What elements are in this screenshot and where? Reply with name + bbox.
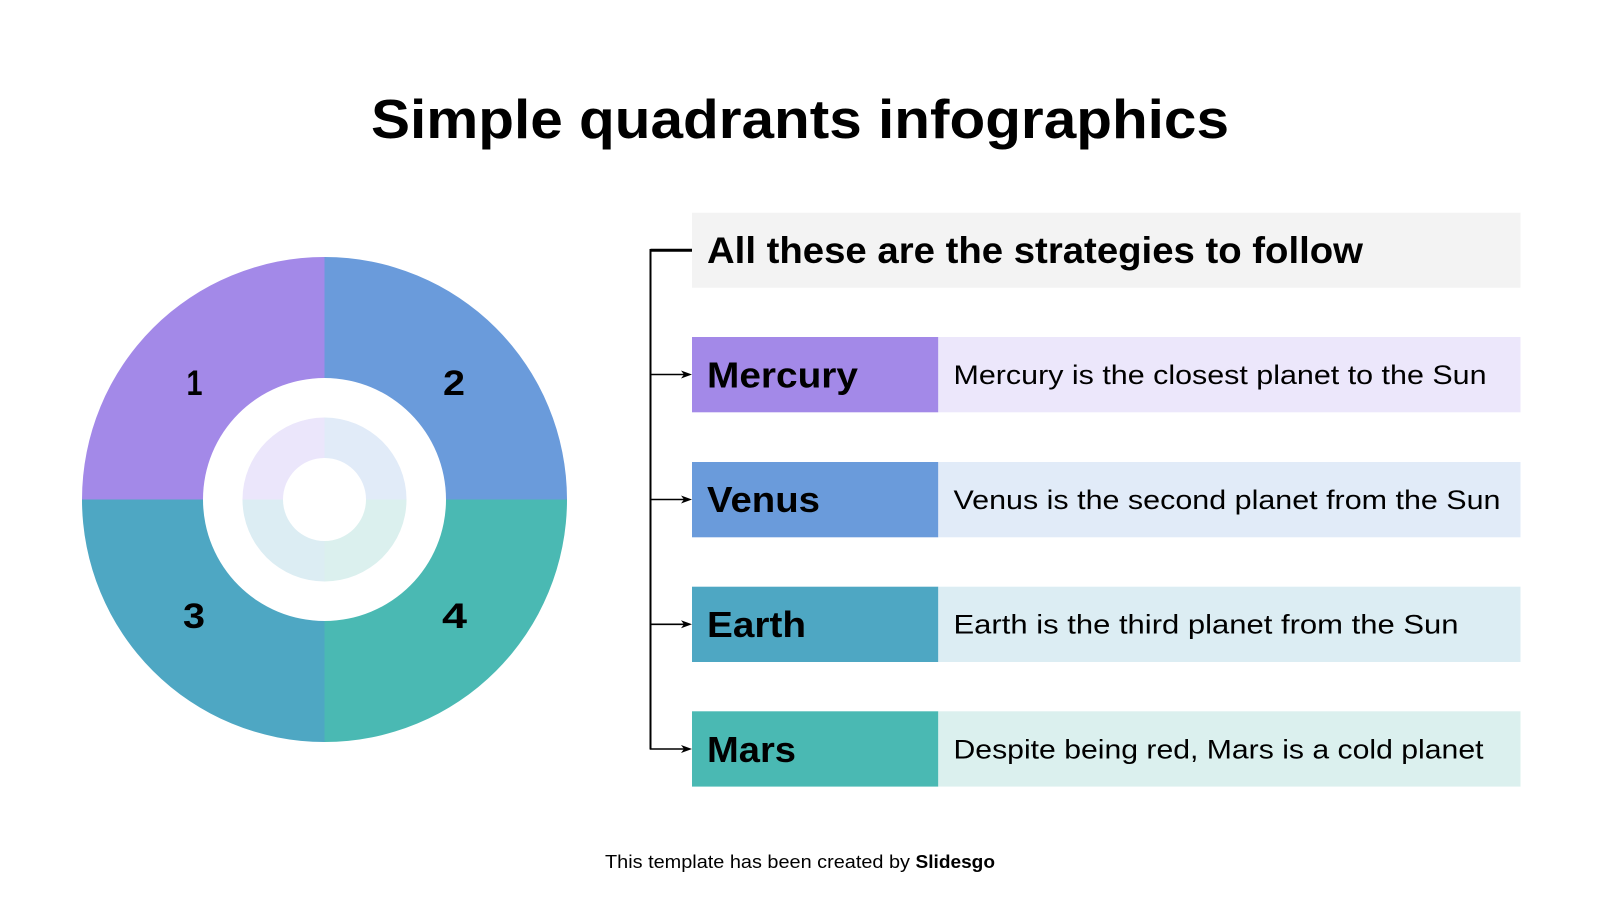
panel: header strategies [692,213,1520,288]
Mars label: Mars [707,729,796,770]
number 2: 2 [443,364,465,403]
title: Simple quadrants infographics [371,88,1229,150]
number 4: 4 [442,597,468,636]
header text: All these are the strategies to follow [707,230,1363,271]
quadrant 4: green [324,500,567,742]
quadrant 2: blue [324,257,567,500]
inner light ring [242,418,406,582]
panel: Venus row [692,462,1520,537]
Earth description: Earth is the third planet from the Sun [954,610,1458,640]
connector bracket with arrows [650,249,692,753]
panel: Mercury row [692,337,1520,412]
panel: Earth row [692,587,1520,662]
Mercury description: Mercury is the closest planet to the Sun [954,360,1486,390]
Earth label: Earth [707,604,806,645]
Mercury label: Mercury [707,354,858,396]
quadrant 3: teal blue [82,500,324,742]
quadrant 1: purple [82,257,324,500]
Venus description: Venus is the second planet from the Sun [954,485,1500,515]
Venus label: Venus [707,479,820,520]
panel: Mars row [692,711,1520,787]
quadrant donut chart [82,257,567,742]
number 3: 3 [183,597,205,636]
Mars description: Despite being red, Mars is a cold planet [954,734,1484,764]
footer credit: Slidesgo [916,851,995,872]
arrowheads [681,370,692,753]
footer credit: This template has been created by [605,851,911,872]
number 1: 1 [186,364,202,403]
